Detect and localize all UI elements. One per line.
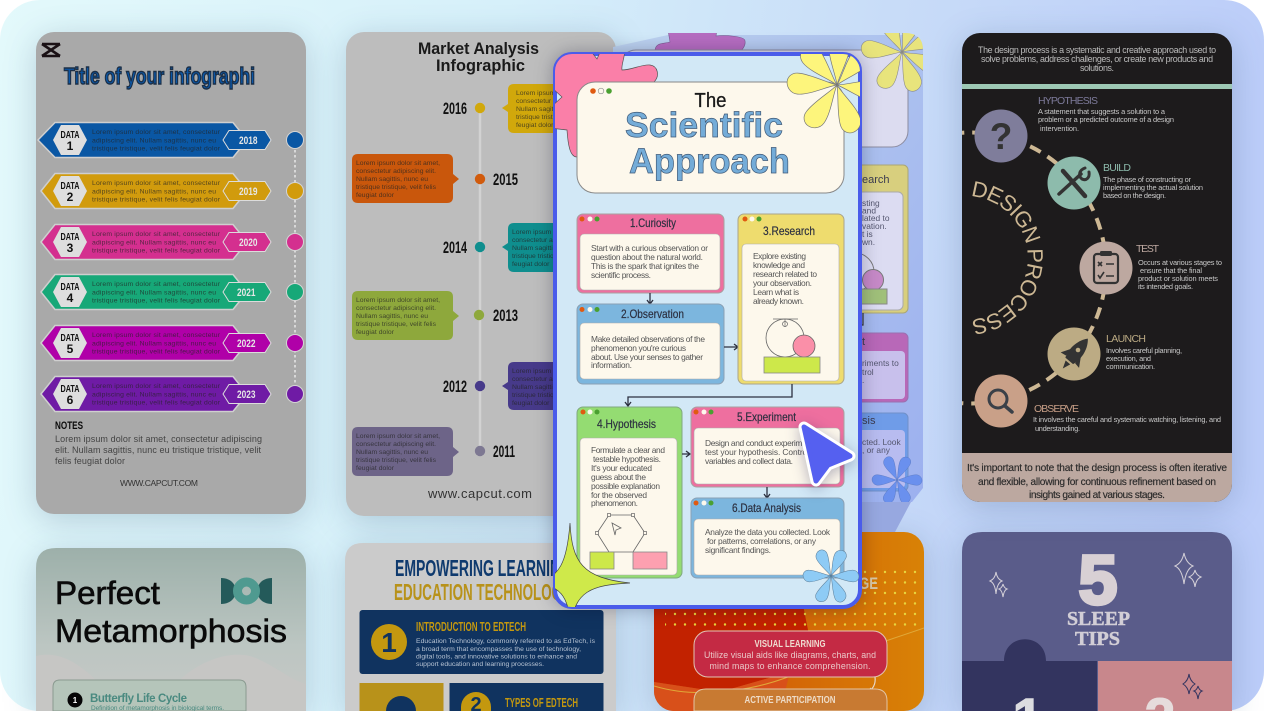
panel: orange learning template	[654, 532, 924, 711]
back card: research: wn.	[861, 237, 875, 247]
back card: experiment	[862, 332, 908, 402]
notes: NOTES	[55, 420, 83, 432]
top intro text: solutions.	[1080, 63, 1114, 73]
back card: research: earch	[862, 174, 890, 186]
year 2011: Nullam sagittis, nunc eu	[356, 449, 428, 456]
step: launch: Involves careful planning,	[1106, 346, 1182, 355]
step: launch: LAUNCH	[1106, 333, 1146, 345]
year 2016: consectetur adipiscing elit.	[516, 98, 596, 105]
illustration: circles and block	[764, 319, 820, 373]
row: data 4: 2021	[237, 287, 256, 299]
step: build: based on the design.	[1103, 191, 1166, 200]
timeline line	[479, 108, 481, 451]
card: experiment: test your hypothesis. Control	[705, 447, 809, 457]
row: data 6: 2023	[237, 389, 256, 401]
step: build: The phase of constructing or	[1103, 175, 1192, 184]
flower yellow	[786, 54, 860, 134]
notes: elit. Nullam sagittis, nunc eu tristique tristique, velit	[55, 445, 261, 455]
website: WWW.CAPCUT.COM	[120, 478, 198, 488]
hills	[36, 655, 306, 711]
top intro text	[978, 46, 1216, 71]
year 2016: 2016	[443, 99, 467, 118]
heading: sleep tips: TIPS	[1075, 628, 1120, 650]
top intro text: The design process is a systematic and creative approach used to	[978, 45, 1216, 55]
dashed arc	[962, 130, 1106, 406]
panel: design process template	[949, 26, 1245, 521]
card: experiment: variables and collect data.	[705, 456, 793, 466]
row: data 5: adipiscing elit. Nullam sagittis, nunc eu	[92, 340, 216, 348]
back card: experiment: trol	[862, 367, 874, 377]
year 2011: feugiat dolor	[356, 465, 395, 472]
butterfly life cycle box	[53, 680, 246, 711]
arrow: curiosity to observation	[647, 293, 653, 304]
year 2013: feugiat dolor	[356, 329, 395, 336]
year 2014	[443, 223, 620, 272]
back card: data analysis: , or any	[862, 445, 891, 455]
card: data analysis: Analyze the data you collected. Look	[705, 527, 831, 537]
card: curiosity: This is the spark that ignites the	[591, 261, 699, 271]
row: data 1: tristique tristique, velit felis feugiat dolor	[92, 146, 221, 152]
back flower pink	[654, 33, 746, 50]
icon: capcut logo	[42, 44, 60, 56]
row: data 5: tristique tristique, velit felis feugiat dolor	[92, 348, 221, 356]
notes: felis feugiat dolor	[55, 456, 125, 466]
icon: metamorphosis logo	[221, 578, 272, 604]
arrow: observation to research	[724, 344, 738, 350]
icon: cursor arrow	[804, 427, 850, 481]
footer band: It's important to note that the design process is often iterative	[967, 463, 1227, 474]
row: data 3	[41, 224, 304, 260]
card: hypothesis: phenomenon.	[591, 498, 638, 508]
heading fragment: GE	[859, 574, 878, 593]
row: data 2: DATA	[60, 181, 80, 192]
back card: experiment: t	[862, 336, 865, 348]
card: data analysis: for patterns, correlations, or any	[707, 536, 817, 546]
back panel	[613, 35, 923, 502]
year 2015: feugiat dolor	[356, 192, 395, 199]
card: hypothesis: It's your educated	[591, 463, 652, 473]
heading: perfect metamorphosis: Perfect	[55, 575, 160, 611]
step: hypothesis	[974, 95, 1174, 162]
row: data 4: DATA	[60, 282, 80, 293]
second row boxes: TYPES OF EDTECH	[505, 695, 578, 710]
row: data 5: Lorem ipsum dolor sit amet, consectetur	[92, 332, 221, 339]
step: test: TEST	[1136, 243, 1160, 255]
year 2014: 2014	[443, 238, 467, 257]
row: data 6: DATA	[60, 384, 80, 395]
connector: research to hypothesis	[625, 384, 792, 406]
row: data 4	[41, 274, 304, 310]
card: hypothesis: testable hypothesis.	[593, 454, 661, 464]
row: data 3: DATA	[60, 232, 80, 243]
card: research	[738, 214, 844, 384]
heading: title of your infographic: Title of your infographi	[64, 63, 255, 89]
year 2011: 2011	[493, 442, 515, 461]
row: data 2	[41, 174, 304, 208]
visual learning box: VISUAL LEARNING	[754, 638, 826, 650]
row: data 4: tristique tristique, velit felis feugiat dolor	[92, 298, 221, 304]
back card: research: vation.	[862, 221, 887, 231]
card: observation: phenomenon you're curious	[591, 343, 686, 353]
introduction box: 1	[381, 627, 397, 658]
card: observation: 2.Observation	[621, 307, 684, 321]
arrow: hypothesis to experiment	[682, 451, 690, 457]
year 2012: 2012	[443, 377, 467, 396]
step: build	[1048, 156, 1203, 210]
heading: EMPOWERING LEARNING	[395, 555, 571, 581]
step: test: its intended goals.	[1138, 282, 1193, 291]
card: research: knowledge and	[753, 260, 805, 270]
row: data 5: 5	[67, 342, 74, 356]
step: observe: It involves the careful and systematic watching, listening, and	[1033, 415, 1221, 424]
row: data 6: Lorem ipsum dolor sit amet, consectetur	[92, 383, 221, 390]
step: build: BUILD	[1103, 162, 1131, 174]
row: data 3: adipiscing elit. Nullam sagittis, nunc eu	[92, 240, 216, 246]
card: curiosity: scientific process.	[591, 270, 651, 280]
year 2014: consectetur adipiscing elit.	[512, 237, 592, 244]
step: launch: execution, and	[1106, 354, 1151, 363]
year 2013: Nullam sagittis, nunc eu	[356, 313, 428, 320]
year 2016: tristique tristique, velit felis	[516, 114, 596, 121]
row: data 2: 2019	[239, 186, 258, 198]
dot pattern	[665, 570, 916, 626]
title card	[577, 82, 844, 193]
year 2014: Lorem ipsum dolor sit amet,	[512, 229, 596, 236]
year 2012	[443, 362, 620, 410]
year 2015: tristique tristique, velit felis	[356, 184, 437, 191]
sparkles	[990, 553, 1201, 597]
card: hypothesis: possible explanation	[591, 481, 660, 491]
introduction box: INTRODUCTION TO EDTECH	[416, 619, 526, 634]
year 2012: tristique tristique, velit felis	[512, 392, 592, 399]
butterfly life cycle box: Butterfly Life Cycle	[90, 693, 187, 705]
step: hypothesis: problem or a predicted outcome of a design	[1038, 115, 1174, 124]
row: data 2: tristique tristique, velit felis feugiat dolor	[92, 196, 221, 204]
card: observation	[577, 304, 724, 384]
panel: 5 sleep tips template	[962, 532, 1232, 711]
fold wedge	[840, 500, 912, 532]
back flower yellow	[860, 33, 923, 92]
introduction box	[360, 610, 604, 674]
red wave	[654, 609, 808, 689]
panel: empowering learning template	[345, 543, 616, 711]
panel: stacked template behind main card	[613, 33, 923, 532]
card: data analysis	[691, 498, 844, 578]
back card: research: and	[862, 206, 876, 216]
icon: green sparkle	[555, 523, 630, 607]
back card: research: sting	[862, 198, 880, 208]
year 2014: tristique tristique, velit felis	[512, 253, 592, 260]
card: experiment	[691, 407, 844, 487]
row: data 3: Lorem ipsum dolor sit amet, consectetur	[92, 231, 221, 238]
row: data 1: 2018	[239, 135, 258, 147]
step: hypothesis: intervention.	[1040, 124, 1079, 133]
heading: the: The	[694, 90, 726, 112]
lower orange-red wave	[654, 678, 788, 711]
card: hypothesis: Formulate a clear and	[591, 445, 665, 455]
back card: data analysis: cted. Look	[862, 437, 901, 447]
row: data 6: 6	[67, 393, 74, 407]
year 2011: Lorem ipsum dolor sit amet,	[356, 433, 440, 440]
row: data 6	[41, 376, 304, 412]
year 2015: Nullam sagittis, nunc eu	[356, 176, 428, 183]
step: hypothesis: HYPOTHESIS	[1038, 95, 1098, 107]
row: data 3: tristique tristique, velit felis feugiat dolor	[92, 248, 221, 254]
notes: Lorem ipsum dolor sit amet, consectetur adipiscing	[55, 434, 262, 444]
row: data 1	[38, 122, 304, 158]
heading: scientific approach	[625, 106, 790, 181]
row: data 6: adipiscing elit. Nullam sagittis, nunc eu	[92, 392, 216, 398]
introduction box: a broad term that encompasses the use of technology,	[416, 646, 581, 653]
heading: scientific approach: Approach	[629, 142, 790, 181]
card: research: already known.	[753, 296, 804, 306]
step: observe	[974, 374, 1221, 433]
puzzle tile 1	[962, 639, 1097, 711]
card: data analysis: significant findings.	[705, 545, 771, 555]
heading: scientific approach: Scientific	[625, 106, 783, 145]
step: launch: communication.	[1106, 362, 1155, 371]
card: research: research related to	[753, 269, 817, 279]
year 2015: consectetur adipiscing elit.	[356, 168, 436, 175]
year 2013: consectetur adipiscing elit.	[356, 305, 436, 312]
year 2014: Nullam sagittis, nunc eu	[512, 245, 584, 252]
back card: data analysis: sis	[862, 415, 876, 427]
heading: market analysis: Market Analysis	[418, 40, 539, 58]
year 2011: tristique tristique, velit felis	[356, 457, 437, 464]
introduction box: Education Technology, commonly referred to as EdTech, is	[416, 638, 596, 645]
curved title: design process: DESIGN PROCESS	[972, 181, 1043, 334]
year 2014: feugiat dolor	[512, 261, 550, 268]
card: research: Learn what is	[753, 287, 799, 297]
timeline dotted line	[294, 140, 296, 394]
year 2012: Nullam sagittis, nunc eu	[512, 384, 584, 391]
panel: timeline infographic template	[36, 32, 306, 514]
top intro text: solve problems, address challenges, or create new products and	[981, 54, 1213, 64]
card: experiment: Design and conduct experiments to	[705, 438, 825, 448]
year 2012: consectetur adipiscing elit.	[512, 376, 592, 383]
visual learning box	[694, 631, 887, 677]
back card: research: lated to	[862, 213, 890, 223]
card: curiosity	[577, 214, 724, 293]
footer band: and flexible, allowing for continuous refinement based on	[978, 477, 1216, 488]
active participation box: ACTIVE PARTICIPATION	[744, 694, 836, 706]
heading	[394, 555, 571, 605]
card: curiosity: question about the natural world.	[591, 252, 703, 262]
year 2013: Lorem ipsum dolor sit amet,	[356, 297, 440, 304]
step: hypothesis: A statement that suggests a solution to a	[1038, 107, 1166, 116]
year 2015: Lorem ipsum dolor sit amet,	[356, 160, 440, 167]
illustration: hexagon and blocks	[590, 514, 667, 569]
year 2016: Nullam sagittis, nunc eu	[516, 106, 588, 113]
flower blue	[803, 548, 859, 604]
footer band: insights gained at various stages.	[1029, 490, 1165, 501]
card: research: your observation.	[753, 278, 812, 288]
card: curiosity: Start with a curious observation or	[591, 243, 708, 253]
flower pink	[550, 50, 657, 157]
row: data 4: adipiscing elit. Nullam sagittis, nunc eu	[92, 290, 216, 296]
visual learning box: Utilize visual aids like diagrams, charts, and	[704, 650, 876, 660]
visual learning box: mind maps to enhance comprehension.	[710, 661, 870, 671]
card: data analysis: 6.Data Analysis	[732, 501, 801, 515]
year 2015	[352, 154, 518, 203]
heading: sleep tips	[1067, 608, 1130, 650]
website: www.capcut.com	[427, 486, 532, 501]
step: build: implementing the actual solution	[1103, 183, 1203, 192]
year 2013: 2013	[493, 306, 518, 325]
year 2011: consectetur adipiscing elit.	[356, 441, 436, 448]
row: data 1: DATA	[60, 130, 80, 141]
card: observation: Make detailed observations of the	[591, 334, 705, 344]
year 2012: Lorem ipsum dolor sit amet,	[512, 368, 596, 375]
introduction box: support education and learning processes.	[416, 661, 544, 668]
card: hypothesis: for the observed	[591, 490, 647, 500]
row: data 2: Lorem ipsum dolor sit amet, consectetur	[92, 180, 221, 187]
card: hypothesis: guess about the	[591, 472, 646, 482]
heading: perfect metamorphosis	[55, 575, 287, 649]
row: data 6: tristique tristique, velit felis feugiat dolor	[92, 400, 221, 406]
step: test: product or solution meets	[1138, 274, 1218, 283]
step: launch	[1048, 328, 1182, 380]
step: hypothesis: ?	[990, 116, 1012, 157]
second row boxes	[360, 683, 604, 711]
step: observe: understanding.	[1035, 424, 1080, 433]
big number 5: 5	[1079, 541, 1117, 619]
panel: market analysis timeline template	[346, 32, 620, 516]
card: curiosity: 1.Curiosity	[630, 216, 676, 230]
puzzle tile 2	[1098, 661, 1232, 711]
year 2011	[352, 427, 515, 476]
row: data 2: adipiscing elit. Nullam sagittis, nunc eu	[92, 188, 216, 196]
row: data 3: 3	[67, 241, 74, 255]
notes	[55, 420, 262, 466]
butterfly life cycle box: 1	[73, 696, 78, 705]
heading: EDUCATION TECHNOLOGY	[394, 579, 571, 605]
row: data 3: 2020	[239, 237, 258, 249]
year 2016	[443, 84, 620, 133]
card: research: 3.Research	[763, 224, 815, 238]
card: observation: about. Use your senses to gather	[591, 352, 703, 362]
year 2013	[352, 291, 518, 340]
year 2013: tristique tristique, velit felis	[356, 321, 437, 328]
heading: perfect metamorphosis: Metamorphosis	[55, 613, 287, 649]
arrow: experiment to data analysis	[764, 487, 770, 498]
card: research: Explore existing	[753, 251, 806, 261]
row: data 2: 2	[67, 190, 74, 204]
footer band	[962, 453, 1232, 502]
year 2016: feugiat dolor	[516, 122, 554, 129]
back card: research: t is	[862, 229, 873, 239]
year 2016: Lorem ipsum dolor sit amet,	[516, 90, 600, 97]
heading: market analysis: Infographic	[436, 57, 525, 75]
row: data 4: Lorem ipsum dolor sit amet, consectetur	[92, 281, 221, 288]
row: data 1: adipiscing elit. Nullam sagittis, nunc eu	[92, 138, 216, 144]
panel: main card the scientific approach	[535, 34, 888, 625]
year 2015: 2015	[493, 170, 518, 189]
row: data 5: DATA	[60, 333, 80, 344]
panel: perfect metamorphosis template	[36, 548, 306, 711]
card: hypothesis	[577, 407, 682, 578]
row: data 5: 2022	[237, 338, 256, 350]
step: test: ensure that the final	[1140, 266, 1202, 275]
card: observation: information.	[591, 360, 632, 370]
step: test	[1080, 242, 1222, 294]
active participation box	[694, 689, 887, 711]
arrow	[866, 677, 875, 694]
connector	[862, 313, 864, 326]
back card: data analysis	[862, 412, 908, 492]
step: observe: OBSERVE	[1034, 403, 1079, 415]
card: hypothesis: 4.Hypothesis	[597, 417, 656, 431]
row: data 1: Lorem ipsum dolor sit amet, consectetur	[92, 129, 221, 136]
card: experiment: 5.Experiment	[737, 410, 797, 424]
introduction box: digital tools, and innovative solutions to enhance and	[416, 654, 577, 660]
step: test: Occurs at various stages to	[1138, 258, 1222, 267]
heading: sleep tips: SLEEP	[1067, 608, 1130, 630]
back card: experiment: .	[862, 375, 864, 385]
year 2012: feugiat dolor	[512, 400, 550, 407]
row: data 1: 1	[67, 139, 74, 153]
back card: research	[862, 164, 908, 314]
row: data 4: 4	[67, 291, 74, 305]
back title card	[620, 50, 908, 147]
back flower blue	[872, 455, 922, 505]
dark sparkles	[1183, 674, 1202, 699]
heading: market analysis	[418, 40, 539, 75]
row: data 5	[41, 326, 304, 360]
back card: experiment: riments to	[862, 358, 899, 368]
